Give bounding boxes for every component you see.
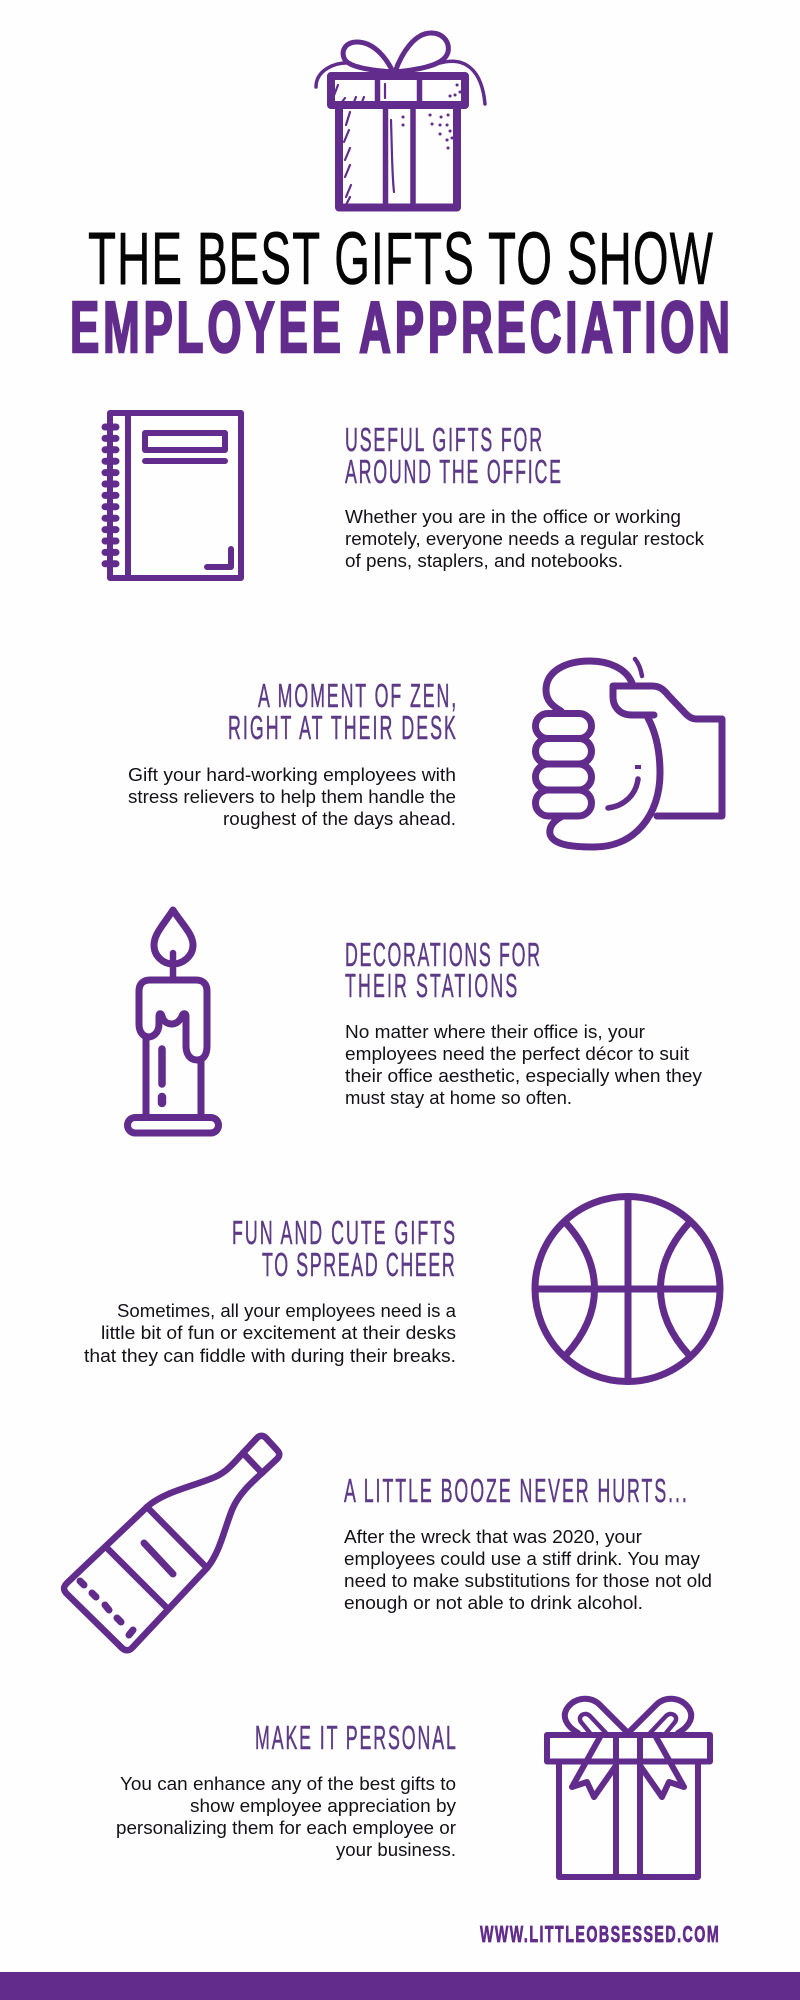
body text [116, 1774, 456, 1860]
body text: Whether you are in the office or working [345, 507, 681, 527]
icon: basketball [535, 1196, 720, 1382]
body text: employees could use a stiff drink. You may [344, 1549, 700, 1569]
body text [84, 1301, 457, 1366]
body text: need to make substitutions for those not old [344, 1571, 712, 1591]
icon: wine bottle [64, 1436, 279, 1650]
body text: must stay at home so often. [345, 1088, 572, 1108]
footer bar [0, 1972, 800, 2000]
heading: A LITTLE BOOZE NEVER HURTS... [344, 1472, 687, 1509]
icon: candle [128, 910, 218, 1133]
body text: No matter where their office is, your [345, 1022, 645, 1042]
body text: show employee appreciation by [190, 1796, 456, 1816]
heading: RIGHT AT THEIR DESK [228, 709, 456, 746]
body text: that they can fiddle with during their breaks. [84, 1346, 456, 1366]
heading [345, 936, 540, 1004]
body text: your business. [336, 1840, 456, 1860]
body text: stress relievers to help them handle the [128, 787, 456, 807]
body text [128, 765, 456, 829]
heading: DECORATIONS FOR [345, 936, 540, 973]
icon: gift box with bow [316, 33, 485, 208]
body text: Sometimes, all your employees need is a [117, 1301, 457, 1321]
heading: THEIR STATIONS [345, 967, 517, 1004]
body text: enough or not able to drink alcohol. [344, 1593, 643, 1613]
heading: MAKE IT PERSONAL [255, 1719, 456, 1756]
heading: TO SPREAD CHEER [262, 1246, 455, 1283]
body text: You can enhance any of the best gifts to [120, 1774, 456, 1794]
header [70, 33, 730, 368]
heading: USEFUL GIFTS FOR [345, 421, 542, 458]
title line 2: EMPLOYEE APPRECIATION [70, 287, 730, 368]
title line 1: THE BEST GIFTS TO SHOW [88, 218, 713, 301]
body text: personalizing them for each employee or [116, 1818, 456, 1838]
panel: booze [64, 1436, 712, 1650]
icon: notebook [105, 413, 241, 578]
body text: employees need the perfect décor to suit [345, 1044, 689, 1064]
body text: roughest of the days ahead. [223, 809, 456, 829]
body text [345, 1022, 702, 1108]
body text: Gift your hard-working employees with [128, 765, 456, 785]
body text: little bit of fun or excitement at their desks [101, 1323, 456, 1343]
panel: decorations [128, 910, 702, 1133]
body text [345, 507, 705, 571]
heading [345, 421, 561, 490]
heading [232, 1214, 455, 1283]
heading [228, 677, 456, 746]
panel: make it personal [116, 1699, 710, 1877]
body text: their office aesthetic, especially when they [345, 1066, 702, 1086]
icon: hand squeezing stress ball [536, 659, 722, 847]
heading: A MOMENT OF ZEN, [258, 677, 456, 714]
website url: WWW.LITTLEOBSESSED.COM [480, 1923, 719, 1948]
icon: wrapped gift [547, 1699, 710, 1877]
body text: After the wreck that was 2020, your [344, 1527, 642, 1547]
body text [344, 1527, 712, 1613]
heading: AROUND THE OFFICE [345, 453, 561, 490]
body text: of pens, staplers, and notebooks. [345, 551, 623, 571]
heading: FUN AND CUTE GIFTS [232, 1214, 455, 1251]
panel: useful gifts [105, 413, 705, 578]
panel: fun and cute [84, 1196, 720, 1382]
body text: remotely, everyone needs a regular restock [345, 529, 705, 549]
panel: moment of zen [128, 659, 722, 847]
